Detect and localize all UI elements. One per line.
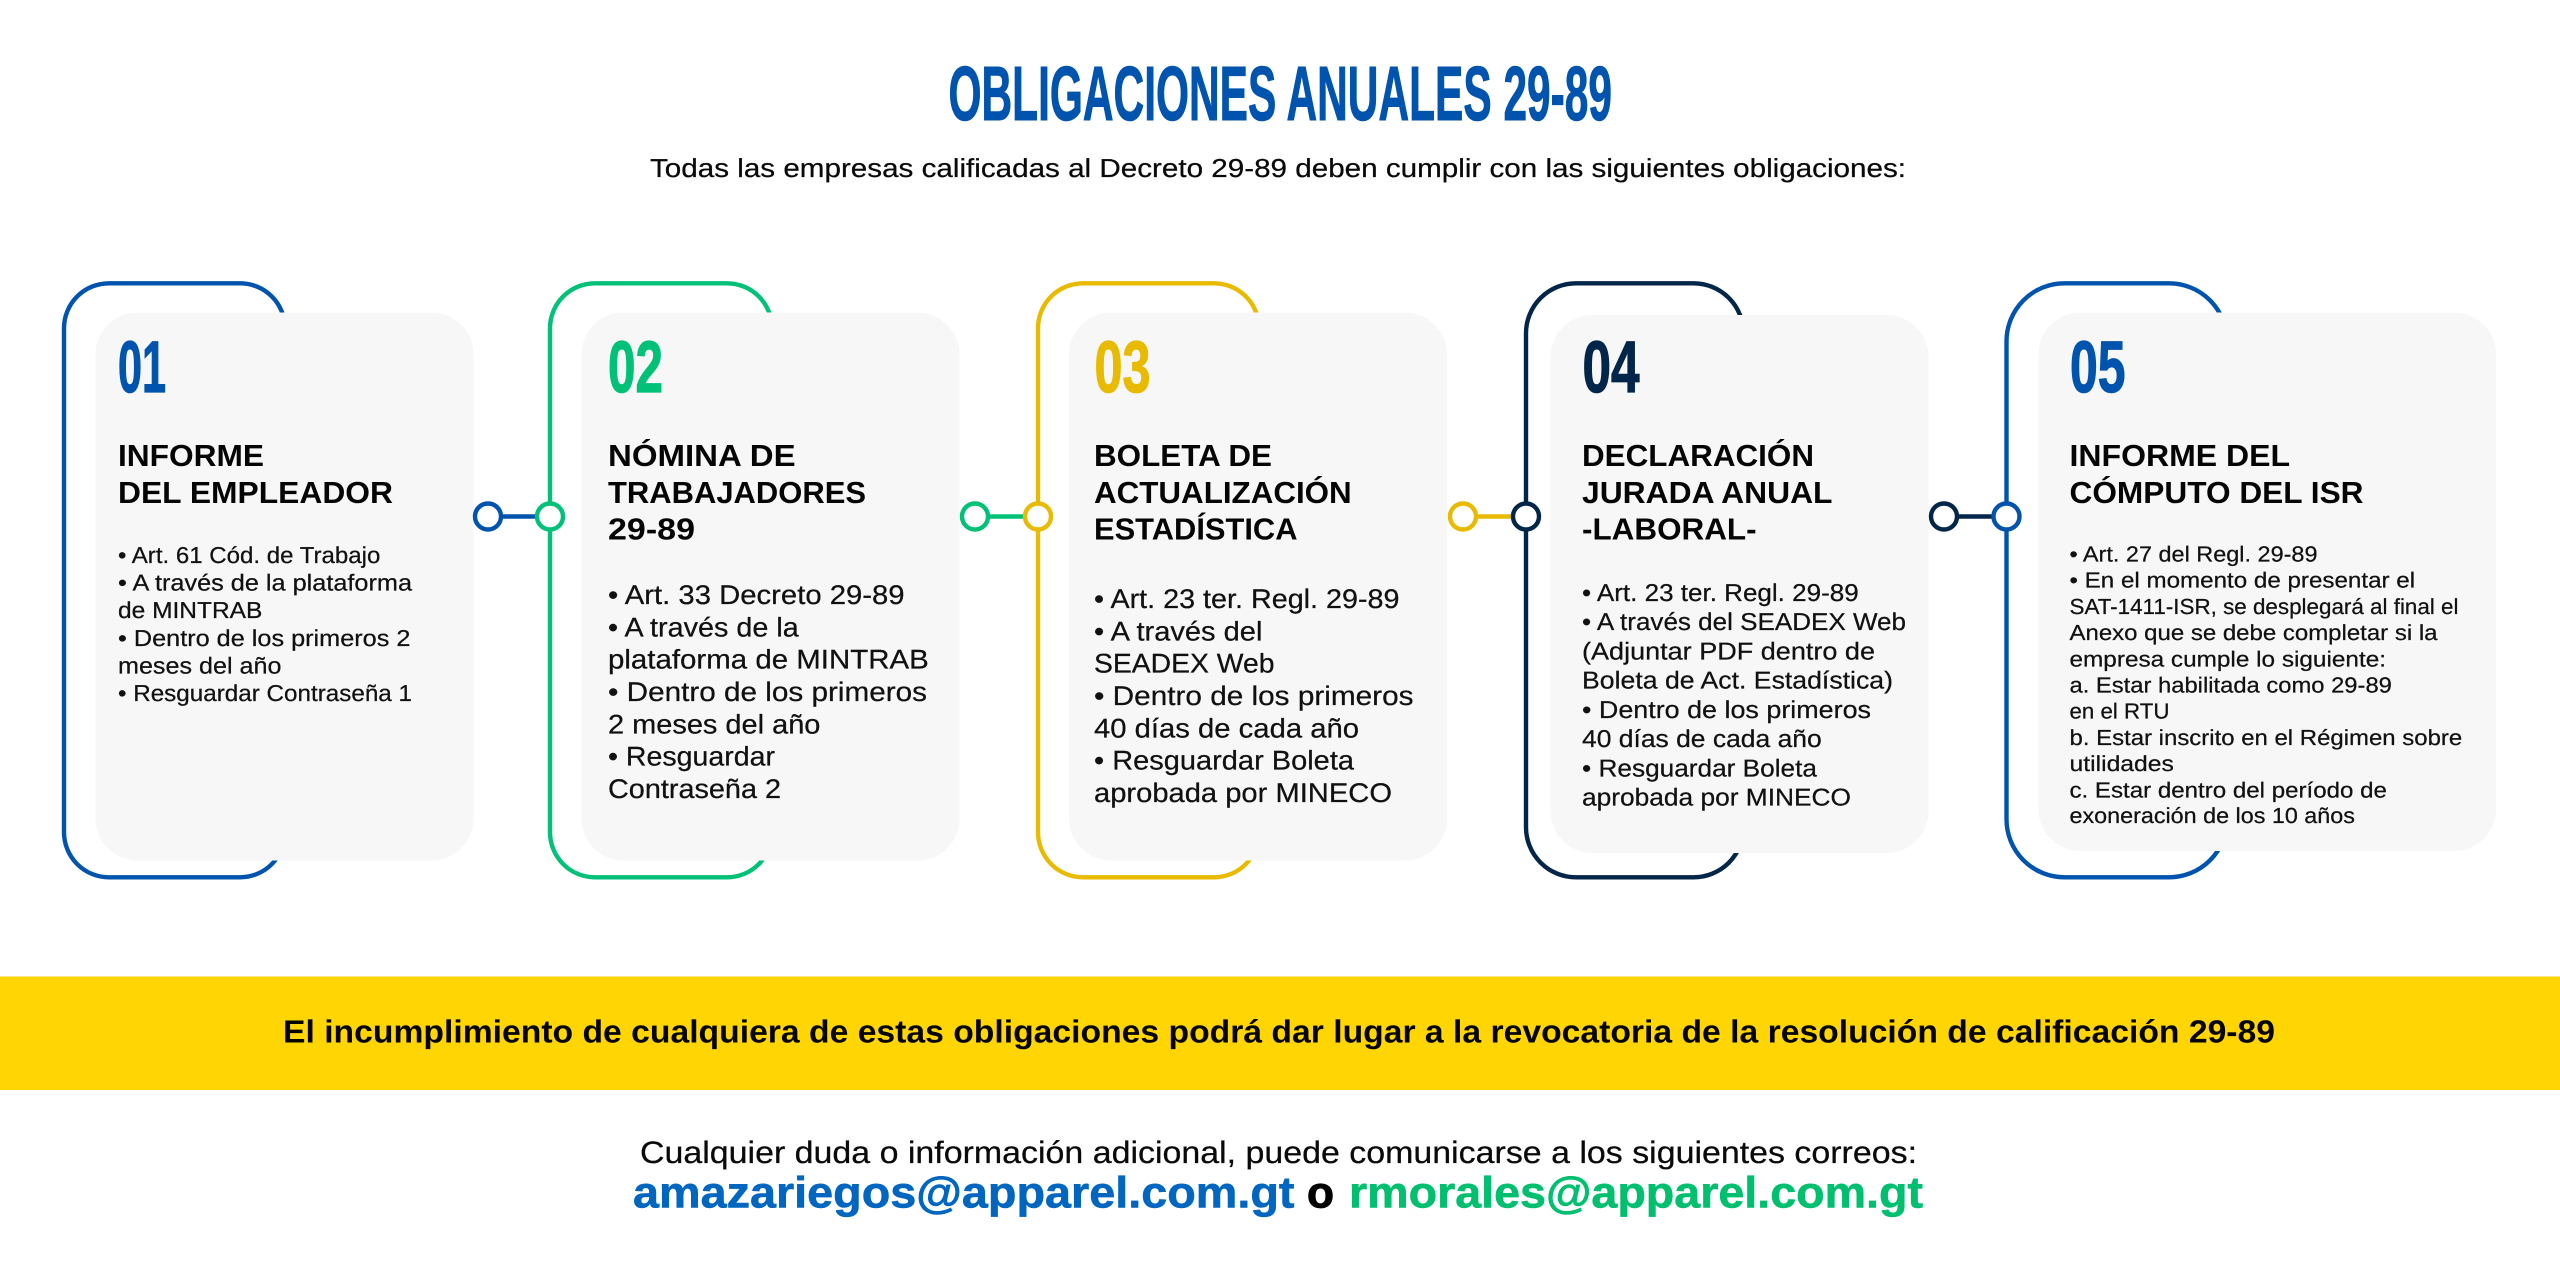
contact text: Cualquier duda o información adicional, puede comunicarse a los siguientes correos: xyxy=(640,1135,1917,1170)
text block: aprobada por MINECO xyxy=(1582,785,1851,812)
panel: 04 declaracion jurada anual xyxy=(1526,283,1928,877)
number 01: 01 xyxy=(118,327,166,408)
text block: • Art. 23 ter. Regl. 29-89 xyxy=(1582,580,1859,607)
panel: 03 boleta de actualizacion xyxy=(1038,283,1447,877)
text block: 40 días de cada año xyxy=(1582,726,1822,753)
text block: de MINTRAB xyxy=(118,597,262,623)
outline: yellow bracket xyxy=(1038,283,1259,877)
number 02: 02 xyxy=(608,327,663,408)
text block: 40 días de cada año xyxy=(1094,713,1359,743)
text block: a. Estar habilitada como 29-89 xyxy=(2070,672,2392,698)
heading: INFORME DEL xyxy=(2070,439,2290,473)
contact emails: o xyxy=(1307,1168,1334,1217)
heading: TRABAJADORES xyxy=(608,476,866,510)
text block: exoneración de los 10 años xyxy=(2070,803,2355,828)
text block xyxy=(2070,542,2462,828)
panel: 05 informe del computo del ISR xyxy=(2006,283,2496,877)
heading xyxy=(118,439,393,510)
heading xyxy=(1582,438,1832,547)
connector: 01 to 02 xyxy=(475,504,563,530)
connector: 04 to 05 xyxy=(1931,504,2020,530)
outline: navy bracket xyxy=(1526,283,1744,877)
text block: b. Estar inscrito en el Régimen sobre xyxy=(2070,725,2462,750)
heading: -LABORAL- xyxy=(1582,513,1757,547)
text block: aprobada por MINECO xyxy=(1094,778,1392,808)
text block xyxy=(1582,580,1906,812)
card background xyxy=(1069,312,1447,860)
heading: NÓMINA DE xyxy=(608,438,796,473)
text block: • Resguardar Boleta xyxy=(1094,746,1355,776)
text block: utilidades xyxy=(2070,751,2174,776)
text block: • Art. 33 Decreto 29-89 xyxy=(608,580,905,610)
text block: meses del año xyxy=(118,652,282,678)
contact emails: amazariegos@apparel.com.gt xyxy=(633,1168,1295,1217)
heading: DEL EMPLEADOR xyxy=(118,476,393,510)
text block: • Resguardar xyxy=(608,742,775,772)
heading xyxy=(1094,439,1352,547)
text block: • Dentro de los primeros xyxy=(608,677,927,707)
text block: • Resguardar Boleta xyxy=(1582,756,1817,782)
text block: • Art. 23 ter. Regl. 29-89 xyxy=(1094,584,1400,614)
text block: • Art. 61 Cód. de Trabajo xyxy=(118,542,380,568)
outline: blue bracket xyxy=(64,283,285,877)
text block: c. Estar dentro del período de xyxy=(2070,777,2387,802)
text block: en el RTU xyxy=(2070,699,2170,724)
card background xyxy=(582,312,960,860)
banner: warning: El incumplimiento de cualquiera de estas obligaciones podrá dar lugar a la revocatoria de la resolución de calificación 29-89 xyxy=(283,1014,2275,1050)
text block: • Art. 27 del Regl. 29-89 xyxy=(2070,542,2318,566)
heading: JURADA ANUAL xyxy=(1582,476,1832,510)
heading: INFORME xyxy=(118,439,264,473)
heading: ACTUALIZACIÓN xyxy=(1094,475,1352,510)
heading: ESTADÍSTICA xyxy=(1094,512,1298,547)
heading: BOLETA DE xyxy=(1094,439,1272,473)
text block: • En el momento de presentar el xyxy=(2070,568,2415,593)
heading: CÓMPUTO DEL ISR xyxy=(2070,475,2364,510)
text block: plataforma de MINTRAB xyxy=(608,645,929,675)
text block: • A través del SEADEX Web xyxy=(1582,609,1906,636)
text block xyxy=(1094,584,1414,808)
card background xyxy=(2038,312,2496,851)
text block: SEADEX Web xyxy=(1094,649,1274,679)
contact emails xyxy=(633,1168,1923,1217)
number 03: 03 xyxy=(1094,327,1150,408)
text block: (Adjuntar PDF dentro de xyxy=(1582,638,1875,666)
text block: • A través de la plataforma xyxy=(118,570,412,596)
banner: warning xyxy=(0,976,2560,1090)
text block: 2 meses del año xyxy=(608,709,820,739)
text block: Contraseña 2 xyxy=(608,774,781,804)
connector: 03 to 04 xyxy=(1450,504,1539,530)
outline: blue bracket xyxy=(2006,283,2227,877)
text block: SAT-1411-ISR, se desplegará al final el xyxy=(2070,594,2458,619)
subtitle: Todas las empresas calificadas al Decreto 29-89 deben cumplir con las siguientes obligaciones: xyxy=(650,153,1906,183)
heading: DECLARACIÓN xyxy=(1582,438,1814,473)
text block: Anexo que se debe completar si la xyxy=(2070,620,2438,645)
text block: Boleta de Act. Estadística) xyxy=(1582,668,1893,695)
card background xyxy=(1550,315,1928,853)
number 05: 05 xyxy=(2070,327,2126,408)
text block: • Resguardar Contraseña 1 xyxy=(118,680,412,706)
text block: • A través de la xyxy=(608,612,800,642)
text block: empresa cumple lo siguiente: xyxy=(2070,646,2386,671)
text block: • Dentro de los primeros xyxy=(1094,681,1414,711)
text block: • Dentro de los primeros xyxy=(1582,697,1871,724)
heading xyxy=(608,438,866,547)
connector: 02 to 03 xyxy=(962,504,1051,530)
card background xyxy=(96,312,474,860)
number 04: 04 xyxy=(1582,327,1640,408)
outline: green bracket xyxy=(550,283,772,877)
contact emails: rmorales@apparel.com.gt xyxy=(1349,1168,1923,1217)
panel: 02 nomina de trabajadores xyxy=(550,283,960,877)
text block: • A través del xyxy=(1094,616,1262,646)
text block xyxy=(118,542,412,706)
heading xyxy=(2070,439,2364,510)
text block xyxy=(608,580,929,804)
text block: • Dentro de los primeros 2 xyxy=(118,625,410,651)
heading: 29-89 xyxy=(608,513,695,547)
title: OBLIGACIONES ANUALES 29-89 xyxy=(948,51,1612,137)
panel: 01 informe del empleador xyxy=(64,283,474,877)
